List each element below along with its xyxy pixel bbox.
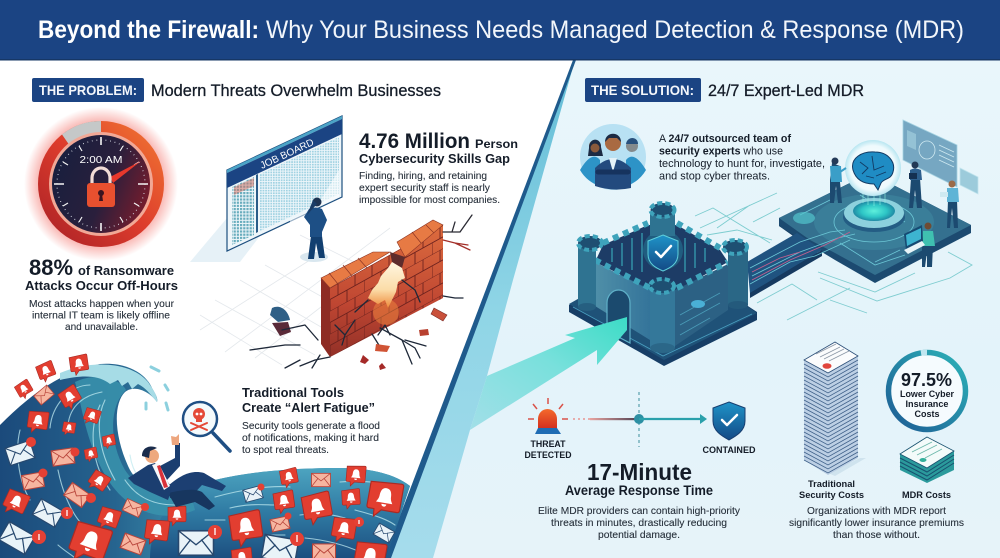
- title banner: Beyond the Firewall:: [38, 16, 259, 44]
- stat: 4.76 million skills gap: 4.76 Million: [359, 130, 470, 153]
- cost comparison caption: Traditional: [808, 479, 855, 490]
- stat: 4.76 million skills gap: Person: [475, 137, 518, 151]
- donut: 97.5% lower insurance: [888, 352, 966, 430]
- stat: 4.76 million skills gap: expert security staff is nearly: [359, 182, 491, 194]
- heading: the solution: [585, 78, 864, 102]
- donut: 97.5% lower insurance: Costs: [914, 409, 940, 420]
- stat: 88% off-hours: [25, 255, 178, 333]
- diagonal divider band: [384, 60, 576, 558]
- title banner: Why Your Business Needs Managed Detection & Response (MDR): [266, 16, 964, 44]
- text: team description: A 24/7 outsourced team of: [659, 133, 791, 145]
- stat: alert fatigue: Security tools generate a flood: [242, 420, 380, 432]
- arrow into castle gate: [470, 317, 627, 430]
- background: right solution panel: [384, 60, 1000, 558]
- stat: 4.76 million skills gap: [359, 130, 518, 206]
- text: team description: technology to hunt for, investigate,: [659, 158, 825, 170]
- cost comparison caption: Security Costs: [799, 490, 864, 501]
- illustration: wave of alerts: [0, 354, 410, 558]
- text: team description: security experts who use: [659, 146, 783, 158]
- floor grid: [200, 228, 400, 365]
- stat: 4.76 million skills gap: Cybersecurity Skills Gap: [359, 151, 510, 166]
- stat: alert fatigue: Create “Alert Fatigue”: [242, 400, 375, 415]
- stat: 88% off-hours: of Ransomware: [78, 263, 174, 278]
- text: team description: [659, 133, 825, 182]
- cost comparison caption: [789, 479, 964, 541]
- title banner: [0, 0, 1000, 60]
- illustration: job board: [190, 116, 342, 262]
- brain hologram: [845, 140, 901, 196]
- timeline: threat to contained: [524, 392, 756, 461]
- cost comparison caption: significantly lower insurance premiums: [789, 517, 964, 529]
- large data screen: [903, 120, 957, 187]
- towers: [578, 236, 748, 353]
- chart: MDR cost stack: [900, 437, 954, 483]
- stat: 4.76 million skills gap: Finding, hiring, and retaining: [359, 170, 487, 182]
- icon: expert team: [580, 124, 646, 190]
- stat: alert fatigue: of notifications, making it hard: [242, 432, 379, 444]
- envelopes: [0, 385, 395, 558]
- illustration: castle fortress: [569, 203, 757, 366]
- circuit traces: [695, 193, 972, 320]
- icon: siren: [528, 398, 568, 434]
- cost comparison caption: MDR Costs: [902, 490, 951, 501]
- donut: 97.5% lower insurance: Insurance: [906, 399, 948, 410]
- donut: 97.5% lower insurance: 97.5%: [901, 370, 952, 390]
- icon: ransomware clock with padlock: [24, 107, 178, 261]
- shield on keep: [648, 235, 678, 271]
- person at the job board: [300, 198, 328, 262]
- heading: the problem: THE PROBLEM:: [39, 82, 137, 98]
- timeline: threat to contained: CONTAINED: [702, 445, 756, 456]
- timeline: threat to contained: DETECTED: [524, 450, 572, 461]
- stat: alert fatigue: [242, 385, 380, 456]
- stat: 88% off-hours: 88%: [29, 255, 73, 280]
- stat: 4.76 million skills gap: impossible for most companies.: [359, 194, 500, 206]
- stat: 17-minute response: Elite MDR providers can contain high-priority: [538, 505, 741, 517]
- illustration: AI command platform: [747, 120, 978, 298]
- small data screen: [960, 168, 978, 194]
- stat: 17-minute response: threats in minutes, drastically reducing: [551, 517, 727, 529]
- timeline: threat to contained: THREAT: [530, 439, 566, 450]
- stat: 17-minute response: Average Response Time: [565, 483, 713, 498]
- chart: traditional security cost stack: [804, 342, 866, 476]
- text: team description: and stop cyber threats.: [659, 170, 770, 182]
- icon: magnifier with skull: [183, 402, 230, 451]
- stat: 17-minute response: [538, 459, 741, 541]
- donut: 97.5% lower insurance: Lower Cyber: [900, 389, 954, 400]
- stat: 88% off-hours: internal IT team is likely offline: [32, 310, 170, 322]
- icon: contained shield: [713, 402, 745, 440]
- stat: alert fatigue: to spot real threats.: [242, 444, 329, 456]
- heading: the problem: Modern Threats Overwhelm Businesses: [151, 82, 441, 100]
- cost comparison caption: Organizations with MDR report: [807, 505, 946, 517]
- drowning businessman: [128, 434, 226, 510]
- icon: ransomware clock with padlock: 2:00 AM: [80, 154, 122, 166]
- stat: 88% off-hours: Most attacks happen when your: [29, 298, 174, 310]
- illustration: job board: JOB BOARD: [259, 137, 316, 172]
- heading: the solution: 24/7 Expert-Led MDR: [708, 82, 864, 100]
- castle walls: [595, 260, 728, 346]
- stat: 88% off-hours: and unavailable.: [65, 321, 138, 333]
- stat: 17-minute response: 17-Minute: [587, 459, 692, 485]
- stat: 17-minute response: potential damage.: [598, 529, 680, 541]
- heading: the problem: [32, 78, 441, 102]
- alert cards: [0, 354, 404, 558]
- illustration: cracked brick wall: [250, 215, 472, 370]
- heading: the solution: THE SOLUTION:: [591, 82, 694, 98]
- check mark: [656, 246, 671, 257]
- stat: alert fatigue: Traditional Tools: [242, 385, 344, 400]
- operators: [830, 158, 959, 267]
- cost comparison caption: than those without.: [833, 529, 920, 541]
- back tower: [650, 203, 675, 236]
- back battlements: [603, 223, 720, 248]
- stat: 88% off-hours: Attacks Occur Off-Hours: [25, 278, 178, 293]
